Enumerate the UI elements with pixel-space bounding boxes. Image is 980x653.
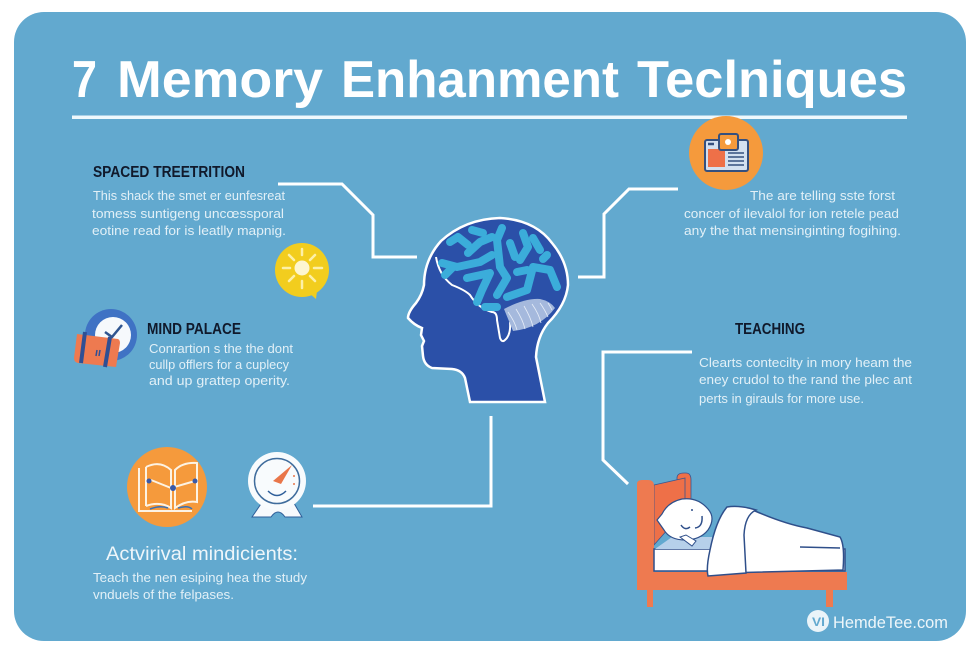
connector: gauge to brain	[313, 416, 491, 506]
icon: orange circle with documents	[689, 116, 763, 190]
body: mind palace	[149, 341, 293, 388]
blanket fold	[707, 506, 756, 576]
icon: brain in head	[408, 218, 568, 402]
connector: teaching to brain	[603, 352, 692, 484]
body: spaced repetition: tomess suntigeng uncœssporal	[92, 206, 284, 221]
pillow	[655, 537, 712, 549]
head silhouette	[408, 218, 568, 402]
body: mind palace: cullp offlers for a cuplecy	[149, 357, 289, 372]
body: spaced repetition: This shack the smet er eunfesreat	[93, 188, 285, 203]
logo: HemdeTee.com	[807, 610, 948, 632]
icon: person sleeping in bed	[637, 473, 847, 607]
blanket body	[725, 509, 844, 573]
icon: yellow sun speech bubble	[275, 243, 329, 299]
heading: active recall: Actvirival mindicients:	[106, 544, 298, 565]
bed legs	[647, 590, 833, 607]
heading: mind palace: MIND PALACE	[147, 321, 241, 338]
title	[72, 51, 907, 109]
headboard and frame	[637, 480, 847, 590]
back pillow	[677, 473, 691, 500]
heading: spaced repetition: SPACED TREETRITION	[93, 164, 245, 181]
body: mind palace: Conrartion s the the dont	[149, 341, 293, 356]
brain folds	[442, 228, 557, 307]
text block: top right: The are telling sste forst	[750, 188, 895, 203]
heading: teaching: TEACHING	[735, 321, 805, 338]
logo: HemdeTee.com: VI	[812, 615, 825, 629]
connector: top right to brain	[578, 189, 678, 277]
title: Teclniques	[637, 51, 907, 109]
text block: active recall	[93, 544, 308, 602]
body: teaching: eney crudol to the rand the plec ant	[699, 372, 912, 387]
body: teaching	[699, 355, 912, 406]
title: Enhanment	[341, 51, 619, 109]
body: active recall: Teach the nen esiping hea the study	[93, 570, 308, 585]
text block: teaching	[699, 321, 912, 406]
title: Memory	[117, 51, 323, 109]
body: spaced repetition	[92, 188, 286, 238]
body: active recall	[93, 570, 308, 602]
head	[657, 499, 712, 540]
text block: top right	[684, 188, 901, 238]
text block: mind palace	[147, 321, 293, 388]
title rule	[72, 116, 907, 119]
body: teaching: perts in girauls for more use.	[699, 391, 864, 406]
text block: spaced repetition	[92, 164, 286, 238]
body: active recall: vnduels of the felpases.	[93, 587, 234, 602]
body: spaced repetition: eotine read for is leatlly mapnig.	[92, 223, 286, 238]
body: mind palace: and up grattep operity.	[149, 373, 290, 388]
title: 7	[72, 51, 97, 109]
icon: open book in orange circle	[127, 447, 207, 527]
text block: top right: concer of ilevalol for ion retele pead	[684, 206, 899, 221]
cerebellum	[504, 299, 555, 331]
logo: HemdeTee.com: HemdeTee.com	[833, 613, 948, 632]
connector: spaced repetition to brain	[278, 184, 417, 257]
icon: clock and suitcase	[74, 309, 137, 367]
brain outline	[436, 257, 510, 341]
mattress	[654, 549, 845, 571]
text block: top right: any the that mensinginting fogihing.	[684, 223, 901, 238]
icon: gauge	[248, 452, 306, 517]
body: teaching: Clearts contecilty in mory heam the	[699, 355, 912, 370]
